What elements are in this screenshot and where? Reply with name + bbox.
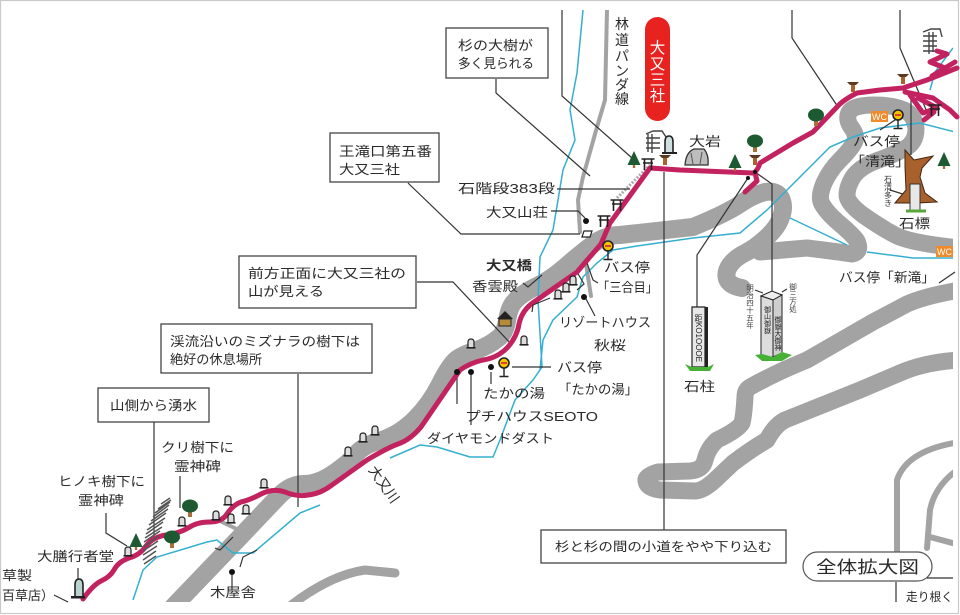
road label: 林道パンダ線: パ xyxy=(615,48,629,64)
map roads xyxy=(172,10,960,608)
icon: guidepost pillar xyxy=(745,282,798,361)
road label: 林道パンダ線: 道 xyxy=(615,32,629,48)
callout: cedars: 多く見られる xyxy=(458,56,534,71)
place labels: 草製 xyxy=(2,568,32,583)
icons: stone monuments xyxy=(124,276,578,557)
road label: 林道パンダ線: ダ xyxy=(615,77,629,93)
callout: stream rest xyxy=(161,324,372,373)
title pill: 大又三社: 大 xyxy=(650,39,665,57)
place labels: 石階段383段 xyxy=(458,181,555,196)
place labels xyxy=(2,134,953,604)
callout: spring water xyxy=(98,388,209,422)
place labels: 走り根く xyxy=(906,590,953,604)
place labels: プチハウスSEOTO xyxy=(465,409,598,424)
place labels: 秋桜 xyxy=(594,338,626,353)
place labels: ヒノキ樹下に xyxy=(58,474,145,489)
icon: giant cedar with stone marker xyxy=(884,150,937,211)
place labels: ダイヤモンドダスト xyxy=(427,431,554,446)
callout: narrow path: 杉と杉の間の小道をやや下り込む xyxy=(555,539,772,554)
title pill: 大又三社: 三 xyxy=(650,72,665,89)
callout: shrine: 大又三社 xyxy=(339,162,400,177)
hatched spring area xyxy=(143,498,171,564)
callout: spring water: 山側から湧水 xyxy=(110,398,197,413)
place labels: 石柱 xyxy=(684,379,715,394)
place labels: 木屋舎 xyxy=(210,585,256,600)
callout: stream rest: 渓流沿いのミズナラの樹下は xyxy=(170,334,360,349)
place labels: バス停 xyxy=(604,260,650,275)
route branches top right xyxy=(905,51,957,120)
icon: stone pillar xyxy=(685,307,714,371)
place labels: 大岩 xyxy=(689,134,721,149)
road label: 林道パンダ線: 林 xyxy=(615,16,629,32)
lower-right map line with label xyxy=(896,578,953,602)
icons: signposts xyxy=(659,74,909,165)
place labels: 大膳行者堂 xyxy=(37,549,114,564)
icon: shrine hall xyxy=(497,311,513,326)
icons: bus stops xyxy=(499,110,903,376)
icon: guidepost pillar: 御山御嶽 xyxy=(764,305,771,335)
place labels: バス停 xyxy=(853,134,900,149)
icon: small shrine at start xyxy=(71,579,85,598)
icon: giant cedar with stone marker: 石清多き xyxy=(884,175,892,207)
road label: 林道パンダ線: ン xyxy=(615,63,629,79)
icon: top-right rock carving xyxy=(923,29,942,54)
button: 全体拡大図 xyxy=(803,552,932,581)
callout: view ahead xyxy=(239,256,416,308)
icon: guidepost pillar: 御三方処 xyxy=(788,282,798,314)
place labels: 百草店） xyxy=(2,588,54,603)
icon: guidepost pillar: 御嶽大御神 xyxy=(774,315,782,352)
stone stairs beside route xyxy=(617,165,650,198)
callout: narrow path xyxy=(541,530,786,563)
icon: WC signs xyxy=(871,111,953,257)
main route xyxy=(83,68,957,599)
callout: cedars xyxy=(446,28,548,78)
place labels: クリ樹下に xyxy=(161,440,234,455)
place labels: 大又川 xyxy=(366,463,403,506)
button: 全体拡大図: 全体拡大図 xyxy=(816,558,919,577)
bridge marks xyxy=(215,275,550,567)
callout: view ahead: 前方正面に大又三社の xyxy=(248,266,406,281)
icons: torii gates xyxy=(598,105,942,227)
place labels: 大又橋 xyxy=(486,258,532,273)
title pill: 大又三社: 又 xyxy=(650,56,665,73)
icon: WC signs: WC xyxy=(937,247,952,257)
callout: view ahead: 山が見える xyxy=(248,284,324,299)
callout: stream rest: 絶好の休息場所 xyxy=(170,352,262,367)
icon: small guest house xyxy=(582,231,592,237)
icon: guidepost pillar: 明治四十五年 xyxy=(745,284,754,330)
place labels: 香雲殿 xyxy=(472,279,518,294)
icon: WC signs: WC xyxy=(872,112,887,122)
place labels: 霊神碑 xyxy=(78,493,124,508)
place labels: 霊神碑 xyxy=(174,459,221,474)
road label: 林道パンダ線: 線 xyxy=(615,91,629,107)
icon: stone pillar: 距KO1OOOE xyxy=(694,314,703,362)
place labels: バス停「新滝」 xyxy=(839,270,935,285)
place labels: 大又山荘 xyxy=(486,205,548,220)
place labels: 石標 xyxy=(899,216,930,231)
place labels: 「清滝」 xyxy=(850,154,910,169)
place labels: 「三合目」 xyxy=(597,280,658,295)
icon: shrine monument xyxy=(646,131,677,154)
place labels: バス停 xyxy=(557,360,602,375)
icons: place dots xyxy=(229,170,757,575)
place labels: たかの湯 xyxy=(483,386,545,401)
callout: shrine: 王滝口第五番 xyxy=(339,144,432,159)
place labels: 「たかの湯」 xyxy=(558,382,638,397)
callout: shrine xyxy=(330,133,439,182)
road label: 林道パンダ線 xyxy=(615,16,629,107)
place labels: リゾートハウス xyxy=(559,315,651,330)
title pill: 大又三社: 社 xyxy=(650,87,666,105)
title pill: 大又三社 xyxy=(645,17,670,121)
icons: trees xyxy=(130,108,950,550)
callout: cedars: 杉の大樹が xyxy=(458,38,533,53)
icon: big rock xyxy=(685,149,708,165)
